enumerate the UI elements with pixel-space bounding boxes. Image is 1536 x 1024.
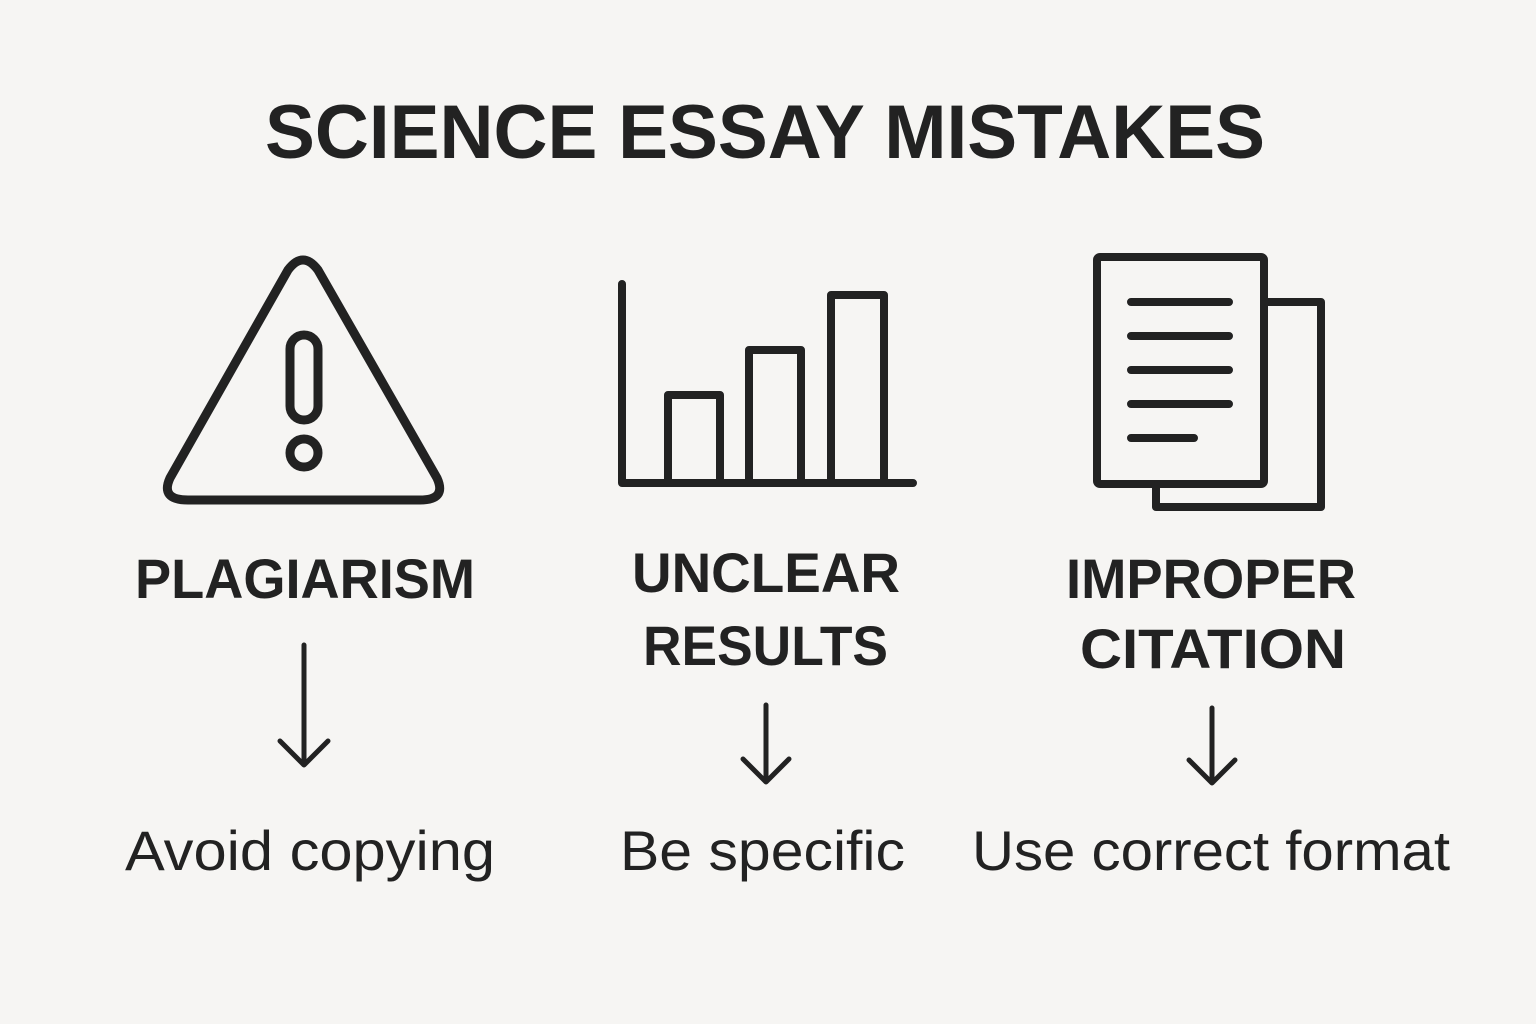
icon: warning triangle — [167, 260, 440, 500]
panel: plagiarism — [125, 260, 495, 882]
heading: plagiarism: PLAGIARISM — [135, 547, 475, 610]
panel: unclear results — [620, 284, 913, 882]
heading: unclear results — [632, 541, 900, 677]
arrow — [1189, 708, 1235, 783]
arrow — [743, 705, 789, 782]
text: be specific: Be specific — [620, 819, 905, 882]
heading: unclear results: RESULTS — [643, 614, 888, 677]
title: SCIENCE ESSAY MISTAKES — [265, 90, 1265, 175]
panel: improper citation — [972, 257, 1450, 882]
heading: improper citation: IMPROPER — [1066, 547, 1356, 610]
heading: improper citation — [1066, 547, 1356, 680]
icon: documents — [1097, 257, 1321, 507]
text: avoid copying: Avoid copying — [125, 819, 495, 882]
icon: bar chart — [622, 284, 913, 483]
text: use correct format: Use correct format — [972, 819, 1450, 882]
heading: unclear results: UNCLEAR — [632, 541, 900, 604]
arrow — [280, 645, 328, 765]
heading: improper citation: CITATION — [1080, 617, 1346, 680]
